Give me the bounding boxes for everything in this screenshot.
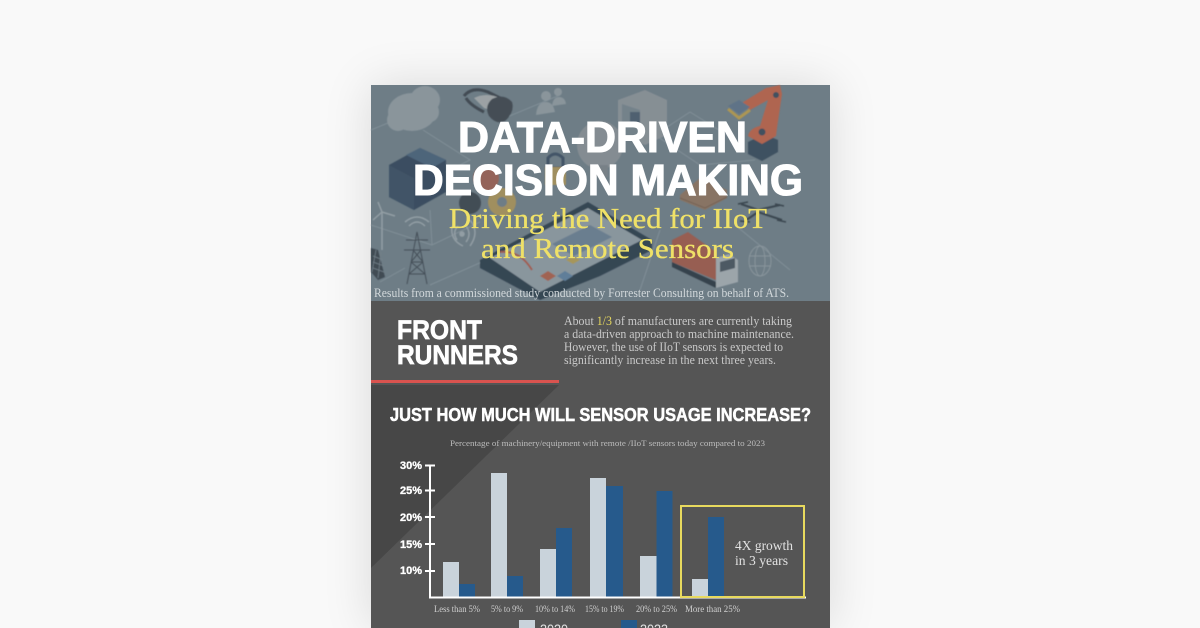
icon: drone xyxy=(738,202,786,222)
x axis labels: 15% to 19% xyxy=(585,605,624,615)
x axis labels: 5% to 9% xyxy=(491,605,523,615)
axes xyxy=(425,465,806,598)
y axis labels: 25% xyxy=(400,485,422,497)
header banner xyxy=(371,85,830,301)
icon: robot arm xyxy=(728,85,782,161)
callout: 4X growth: in 3 years xyxy=(735,553,788,568)
chart heading: JUST HOW MUCH WILL SENSOR USAGE INCREASE? xyxy=(390,405,811,425)
callout: 4X growth xyxy=(681,506,804,597)
icon: signal tower xyxy=(404,217,430,284)
intro paragraph: a data-driven approach to machine maintenance. xyxy=(564,327,794,341)
icon: cardboard box xyxy=(680,178,727,210)
x axis labels xyxy=(434,605,740,615)
icon: delivery truck xyxy=(672,232,738,288)
illustration: network lines xyxy=(371,95,790,290)
icon: server rack xyxy=(389,148,446,210)
y axis labels: 15% xyxy=(400,539,422,551)
icon: solar panel xyxy=(371,248,385,280)
intro paragraph: About 1/3 of manufacturers are currently taking xyxy=(564,314,793,328)
bars 2023 xyxy=(459,486,724,598)
title: DECISION MAKING xyxy=(413,156,803,205)
legend xyxy=(519,620,668,628)
icon: globe xyxy=(749,246,771,276)
icon: light bulb xyxy=(577,121,623,177)
y axis labels xyxy=(400,460,422,577)
intro paragraph: significantly increase in the next three years. xyxy=(564,353,776,367)
x axis labels: 10% to 14% xyxy=(535,605,575,615)
title xyxy=(413,113,803,205)
y axis labels: 10% xyxy=(400,565,422,577)
study credit line: Results from a commissioned study conducted by Forrester Consulting on behalf of ATS. xyxy=(374,286,789,300)
bar chart xyxy=(400,460,806,615)
illustration background xyxy=(371,85,790,300)
icon: cloud xyxy=(387,86,440,131)
icon: tablet xyxy=(480,202,652,300)
icon: gears xyxy=(459,154,566,216)
bars 2020 xyxy=(443,473,708,598)
heading: front runners: FRONT xyxy=(397,315,482,345)
icon: warehouse shelf xyxy=(618,90,667,145)
chart subtitle: Percentage of machinery/equipment with remote /IIoT sensors today compared to 2023 xyxy=(450,438,765,448)
subtitle: Driving the Need for IIoT xyxy=(449,204,767,235)
intro paragraph: However, the use of IIoT sensors is expected to xyxy=(564,340,783,354)
icon: VR headset xyxy=(464,90,513,122)
subtitle: and Remote Sensors xyxy=(481,234,734,265)
callout: 4X growth: 4X growth xyxy=(735,538,793,553)
panel: front runners and chart xyxy=(371,301,830,628)
subtitle xyxy=(449,204,767,265)
icon: wind turbine xyxy=(373,202,395,250)
title: DATA-DRIVEN xyxy=(458,113,747,162)
y axis labels: 20% xyxy=(400,512,422,524)
heading: front runners: RUNNERS xyxy=(397,340,518,370)
icon: people xyxy=(536,88,566,115)
red divider xyxy=(371,380,559,383)
x axis labels: 20% to 25% xyxy=(636,605,677,615)
x axis labels: More than 25% xyxy=(685,605,740,615)
icon: wifi signal xyxy=(452,220,475,246)
intro paragraph xyxy=(564,314,794,367)
x axis labels: Less than 5% xyxy=(434,605,480,615)
y axis labels: 30% xyxy=(400,460,422,472)
diagonal shade xyxy=(371,385,559,568)
heading: front runners xyxy=(397,315,518,370)
